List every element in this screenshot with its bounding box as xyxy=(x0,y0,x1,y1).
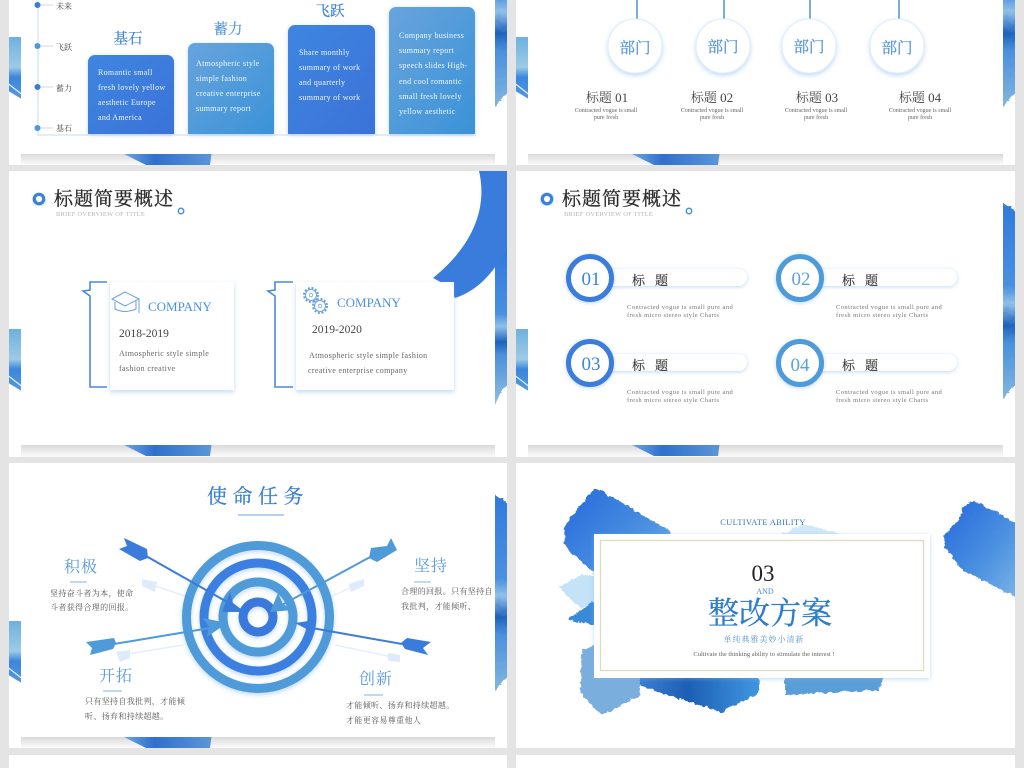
goal: 坚持 xyxy=(401,557,493,612)
item 01: Contracted vogue is small pure and xyxy=(627,304,733,311)
watercolor strips xyxy=(0,487,514,748)
department circles xyxy=(608,19,924,73)
heading: BRIEF OVERVIEW OF TITLE xyxy=(56,211,145,218)
target xyxy=(186,546,330,688)
heading xyxy=(34,188,184,218)
card: 2019-2020 xyxy=(268,282,454,390)
bar: 基石 xyxy=(88,30,174,134)
bar: 基石: aesthetic Europe xyxy=(98,98,156,107)
bar: 蓄力 xyxy=(188,21,274,134)
bar: 基石: fresh lovely yellow xyxy=(98,83,165,92)
bar: company summary: yellow aesthetic xyxy=(399,107,456,116)
card: 2019-2020: 2019-2020 xyxy=(312,324,362,336)
watercolor strips xyxy=(507,195,1022,456)
heading: 标题简要概述 xyxy=(562,188,682,210)
timeline axis: 基石 xyxy=(56,123,72,133)
bar: company summary: small fresh lovely xyxy=(399,92,462,101)
item 01 xyxy=(568,256,747,319)
department circles: 部门 xyxy=(793,38,825,56)
department labels: 标题 03 xyxy=(796,90,838,105)
item 01: 01 xyxy=(582,269,600,290)
panel: slide section cover xyxy=(516,463,1022,748)
goal: 创新: 创新 xyxy=(359,670,393,688)
arrow: top left xyxy=(119,538,245,612)
department labels: Contracted vogue is small xyxy=(785,108,848,114)
department labels: 标题 01 xyxy=(586,90,628,105)
arrow: lower right xyxy=(295,620,431,655)
goal: 积极 xyxy=(50,557,134,612)
department circles: 部门 xyxy=(881,39,913,57)
bar: 蓄力: simple fashion xyxy=(196,74,247,83)
faint arrows xyxy=(116,579,400,662)
department labels xyxy=(575,90,952,121)
goal: 坚持: 坚持 xyxy=(414,557,448,575)
goal: 创新: 才能倾听、扬弃和持续超越。 xyxy=(346,700,455,710)
goal: 开拓: 只有坚持自我批判，才能倾 xyxy=(85,696,186,707)
card: 2018-2019: Atmospheric style simple xyxy=(119,349,209,358)
department circles: 部门 xyxy=(619,39,651,57)
bar: company summary xyxy=(389,7,475,134)
item 02: fresh micro stereo style Charts xyxy=(836,312,928,319)
label: cultivate ability: CULTIVATE ABILITY xyxy=(720,517,806,527)
item 02: Contracted vogue is small pure and xyxy=(836,304,942,311)
icon: graduation cap xyxy=(112,292,139,313)
timeline axis xyxy=(34,0,476,135)
item 03: fresh micro stereo style Charts xyxy=(627,397,719,404)
department labels: 标题 02 xyxy=(691,90,733,105)
department labels: 标题 04 xyxy=(899,90,942,105)
heading: 标题简要概述 xyxy=(54,188,174,210)
department labels: Contracted vogue is small xyxy=(575,108,638,114)
title card: AND xyxy=(756,587,774,596)
bar: 基石: 基石 xyxy=(114,30,142,48)
title card: 单纯典雅美妙小清新 xyxy=(724,634,804,644)
item 03: Contracted vogue is small pure and xyxy=(627,389,733,396)
title card: 整改方案 xyxy=(708,596,832,631)
goal: 开拓 xyxy=(85,667,186,721)
bar: 基石: Romantic small xyxy=(98,68,153,77)
item 04: 标题 xyxy=(842,358,888,373)
bar: 蓄力: summary report xyxy=(196,104,252,113)
panel: slide numbered list xyxy=(507,171,1022,457)
watercolor strips xyxy=(0,195,514,456)
department labels: pure fresh xyxy=(700,114,724,121)
brush arc xyxy=(433,171,507,405)
card: 2019-2020: creative enterprise company xyxy=(308,366,408,375)
panel: slide departments xyxy=(507,0,1022,165)
department labels: pure fresh xyxy=(594,114,618,121)
watercolor blobs xyxy=(559,488,1022,715)
card: 2018-2019: COMPANY xyxy=(148,299,212,314)
department labels: pure fresh xyxy=(804,114,828,121)
bar: 飞跃 xyxy=(288,3,375,134)
goal: 积极: 斗者获得合理的回报。 xyxy=(50,602,134,612)
watercolor strips xyxy=(507,0,1022,165)
item 04: 04 xyxy=(790,355,810,376)
bar: 蓄力: creative enterprise xyxy=(196,89,261,98)
arrow: lower left xyxy=(86,618,227,655)
bar: company summary: speech slides High- xyxy=(399,61,467,70)
bar: 飞跃: 飞跃 xyxy=(316,3,345,20)
watercolor strips xyxy=(0,0,514,165)
goal: 坚持: 合理的回报。只有坚持自 xyxy=(401,586,493,596)
department labels: Contracted vogue is small xyxy=(889,108,952,114)
item 03: 标题 xyxy=(632,358,678,373)
card: 2019-2020: COMPANY xyxy=(337,295,401,310)
item 02 xyxy=(778,256,957,319)
goal: 开拓: 开拓 xyxy=(99,667,133,685)
goal: 坚持: 我批判，才能倾听、 xyxy=(401,601,476,612)
item 04 xyxy=(778,342,957,404)
department labels: pure fresh xyxy=(908,114,932,121)
panel: slide company history xyxy=(0,171,514,457)
card: 2018-2019: fashion creative xyxy=(119,364,176,373)
bar: company summary: Company business xyxy=(399,31,464,40)
goal: 开拓: 听、扬弃和持续超越。 xyxy=(85,711,168,721)
panel: next row right slide xyxy=(516,755,1015,768)
heading: 使命任务 xyxy=(207,485,309,508)
panel: slide mission target xyxy=(0,463,514,748)
bar: company summary: end cool romantic xyxy=(399,77,462,86)
bar: 飞跃: Share monthly xyxy=(299,48,350,57)
timeline axis: 蓄力 xyxy=(56,83,72,93)
item 02: 02 xyxy=(792,269,810,290)
bar: company summary: summary report xyxy=(399,46,455,55)
title card: 03 xyxy=(752,561,774,586)
arrow: top right xyxy=(270,538,397,612)
icon: gears xyxy=(304,288,327,313)
goal: 积极: 坚持奋斗者为本，使命 xyxy=(50,588,134,599)
timeline axis: 飞跃 xyxy=(56,43,72,52)
item 04: fresh micro stereo style Charts xyxy=(836,397,928,404)
item 02: 标题 xyxy=(842,273,888,288)
bar: 飞跃: summary of work xyxy=(299,93,360,102)
item 04: Contracted vogue is small pure and xyxy=(836,389,942,396)
timeline axis: 未来 xyxy=(56,1,72,11)
hanging lines xyxy=(637,0,899,19)
panel: slide timeline bars xyxy=(0,0,514,165)
bar: 飞跃: and quarterly xyxy=(299,78,345,87)
panel: next row left slide xyxy=(9,755,507,768)
card: 2019-2020: Atmospheric style simple fashion xyxy=(309,351,428,360)
heading: BRIEF OVERVIEW OF TITLE xyxy=(564,211,653,218)
item 01: 标题 xyxy=(632,273,678,288)
bar: 飞跃: summary of work xyxy=(299,63,360,72)
bar: 蓄力: 蓄力 xyxy=(214,21,242,38)
heading xyxy=(542,188,692,218)
item 03 xyxy=(568,342,747,404)
goal: 创新 xyxy=(346,670,455,725)
goal: 积极: 积极 xyxy=(64,557,98,576)
department circles: 部门 xyxy=(707,38,739,56)
bar: 基石: and America xyxy=(98,113,142,122)
bar: 蓄力: Atmospheric style xyxy=(196,59,260,68)
department labels: Contracted vogue is small xyxy=(681,108,744,114)
card: 2018-2019 xyxy=(83,282,234,390)
card: 2018-2019: 2018-2019 xyxy=(119,328,169,340)
title card xyxy=(594,534,930,678)
item 01: fresh micro stereo style Charts xyxy=(627,312,719,319)
goal: 创新: 才能更容易尊重他人 xyxy=(346,715,421,725)
title card: Cultivate the thinking ability to stimulate the interest ! xyxy=(693,651,835,658)
item 03: 03 xyxy=(582,354,600,375)
